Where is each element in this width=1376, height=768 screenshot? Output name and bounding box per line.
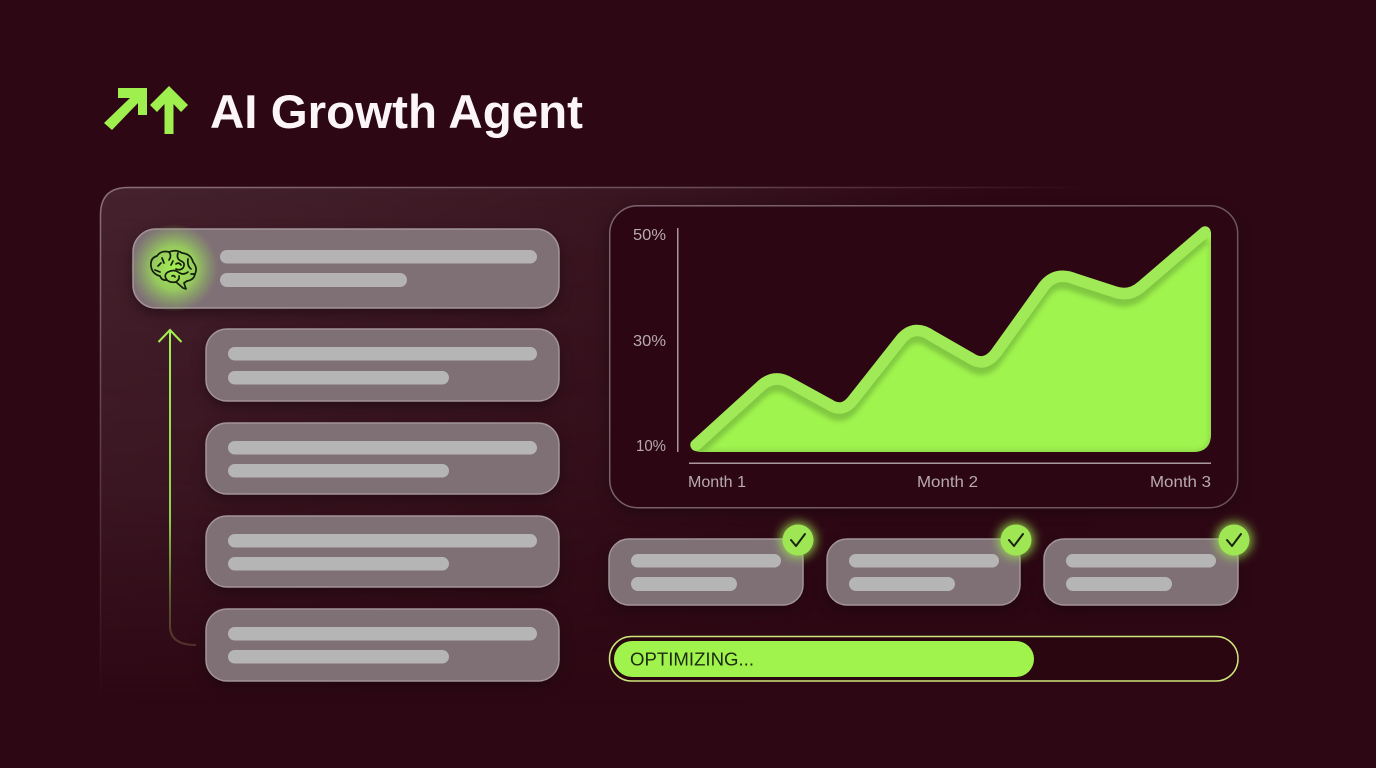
area chart [692, 229, 1211, 452]
title: AI Growth Agent [210, 85, 583, 138]
y axis: 50% [633, 227, 666, 244]
text placeholder bars [220, 250, 537, 264]
card: task 3 [206, 516, 559, 587]
card: result 3 [1044, 522, 1252, 605]
y axis [633, 227, 678, 455]
card: task 2 [206, 423, 559, 494]
card: brain agent [130, 224, 559, 312]
card: task 1 [206, 329, 559, 401]
y axis: 30% [633, 333, 666, 350]
icon glow [130, 224, 218, 312]
card: result 1 [609, 522, 816, 605]
panel: task list [100, 187, 1090, 705]
x axis: Month 2 [917, 474, 978, 491]
progress bar [610, 636, 1238, 681]
icon: brain [151, 251, 196, 289]
title group [104, 85, 583, 138]
x axis: Month 1 [688, 474, 746, 491]
arrow: upward flow [158, 330, 196, 645]
card: task 4 [206, 609, 559, 681]
progress label: OPTIMIZING... [630, 650, 754, 670]
icon: growth arrows [104, 86, 188, 134]
icon: check badge [998, 522, 1034, 558]
x axis [688, 462, 1211, 491]
icon: check badge [780, 522, 816, 558]
y axis: 10% [636, 438, 666, 455]
panel: growth chart [610, 206, 1238, 508]
panel background [101, 188, 770, 576]
icon: check badge [1216, 522, 1252, 558]
progress fill [614, 641, 1034, 677]
card: result 2 [827, 522, 1034, 605]
x axis: Month 3 [1150, 474, 1211, 491]
